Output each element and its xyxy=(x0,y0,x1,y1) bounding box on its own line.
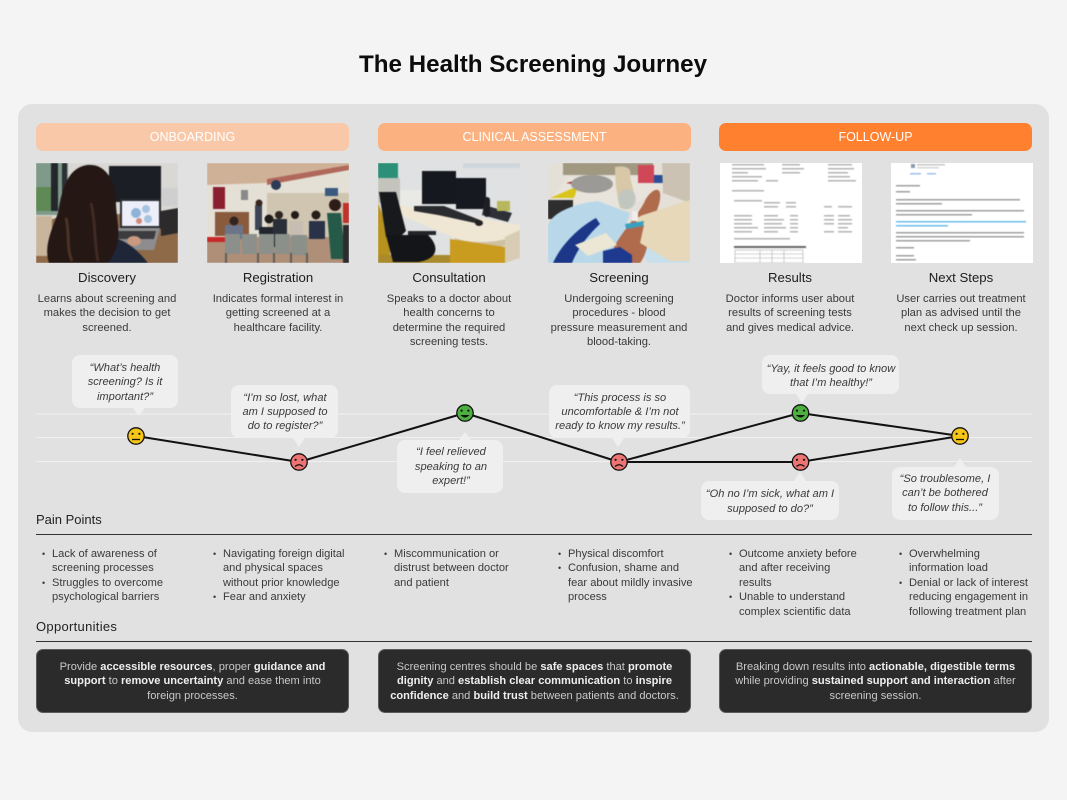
stage: screening: Screening xyxy=(589,270,649,285)
opportunity: follow-up: screening session. xyxy=(830,690,921,702)
stage: results: Results xyxy=(768,270,812,285)
stage: consultation: health concerns to xyxy=(403,307,495,319)
opportunity: clinical assessment: confidence and build trust between patients and doctors. xyxy=(390,690,679,702)
quote: next steps: to follow this...” xyxy=(908,502,983,514)
quote: discovery: screening? Is it xyxy=(88,376,163,388)
pain points: discovery: Lack of awareness of xyxy=(52,548,157,560)
stage: screening xyxy=(551,270,687,348)
pain points: discovery: Struggles to overcome xyxy=(52,577,163,589)
stage: screening: blood-taking. xyxy=(587,336,651,348)
stage: discovery: screened. xyxy=(82,322,132,334)
pain points: results: and after receiving xyxy=(739,562,830,574)
opportunity: follow-up xyxy=(719,649,1032,713)
pain points: results: Outcome anxiety before xyxy=(739,548,857,560)
stage: consultation: Consultation xyxy=(412,270,486,285)
phase header: follow-up: FOLLOW-UP xyxy=(838,130,913,144)
quote: positive result xyxy=(762,355,899,403)
heading: pain points: Pain Points xyxy=(36,512,102,527)
stage: results: results of screening tests xyxy=(728,307,852,319)
pain points: registration: Navigating foreign digital xyxy=(223,548,344,560)
pain points: consultation: distrust between doctor xyxy=(394,562,509,574)
pain points: discovery: screening processes xyxy=(52,562,154,574)
quote: negative result xyxy=(701,472,839,520)
quote: next steps xyxy=(892,458,999,520)
emoji: happy consultation xyxy=(457,405,473,421)
pain points: registration: and physical spaces xyxy=(223,562,323,574)
opportunity: onboarding xyxy=(36,649,349,713)
opportunity: onboarding: foreign processes. xyxy=(147,690,238,702)
emoji: sad screening xyxy=(611,454,627,470)
quote: negative result: “Oh no I’m sick, what am I xyxy=(706,488,834,500)
title: The Health Screening Journey xyxy=(359,51,707,78)
quote: consultation: “I feel relieved xyxy=(416,446,487,458)
quote: consultation: expert!” xyxy=(432,475,471,487)
pain points: next steps: Denial or lack of interest xyxy=(909,577,1028,589)
emoji: sad results xyxy=(792,454,809,470)
pain points: registration: without prior knowledge xyxy=(223,577,340,589)
pain points: registration xyxy=(213,548,344,603)
opportunity: clinical assessment: dignity and establish clear communication to inspire xyxy=(397,675,672,687)
quote: screening: uncomfortable & I’m not xyxy=(561,406,679,418)
pain points: results: Unable to understand xyxy=(739,591,845,603)
quote: positive result: that I’m healthy!” xyxy=(790,377,873,389)
stage: registration: Registration xyxy=(243,270,313,285)
photo: consultation xyxy=(378,163,520,263)
pain points: next steps xyxy=(899,548,1028,618)
pain points: results: complex scientific data xyxy=(739,606,851,618)
stage: screening: pressure measurement and xyxy=(551,322,687,334)
pain points: next steps: following treatment plan xyxy=(909,606,1026,618)
pain points: screening: Physical discomfort xyxy=(568,548,664,560)
pain points: next steps: reducing engagement in xyxy=(909,591,1028,603)
photo: registration xyxy=(207,163,349,263)
stage: next steps xyxy=(896,270,1026,334)
quote: registration: do to register?” xyxy=(248,420,324,432)
quote: screening xyxy=(549,385,690,447)
pain points: consultation: and patient xyxy=(394,577,449,589)
pain points: results: results xyxy=(739,577,772,589)
opportunity: clinical assessment: Screening centres should be safe spaces that promote xyxy=(397,661,672,673)
photo: screening xyxy=(548,163,690,263)
stage: next steps: plan as advised until the xyxy=(901,307,1021,319)
stage: discovery: Learns about screening and xyxy=(38,293,176,305)
quote: discovery: important?” xyxy=(97,391,154,403)
phase header: clinical assessment: CLINICAL ASSESSMENT xyxy=(462,130,607,144)
main panel xyxy=(18,104,1049,732)
stage: discovery: Discovery xyxy=(78,270,136,285)
stage: next steps: User carries out treatment xyxy=(896,293,1026,305)
phase header: onboarding: ONBOARDING xyxy=(150,130,235,144)
journey line xyxy=(136,413,960,462)
photo: discovery xyxy=(36,163,178,263)
stage: registration: getting screened at a xyxy=(226,307,330,319)
pain points: discovery: psychological barriers xyxy=(52,591,159,603)
stage: screening: Undergoing screening xyxy=(564,293,674,305)
emoji: neutral discovery xyxy=(128,428,144,444)
quote: next steps: “So troublesome, I xyxy=(900,473,990,485)
quote: discovery xyxy=(72,355,178,416)
emoji: happy results xyxy=(792,405,809,421)
pain points: consultation: Miscommunication or xyxy=(394,548,499,560)
phase header: follow-up xyxy=(719,123,1032,151)
stage: next steps: Next Steps xyxy=(929,270,993,285)
opportunity: follow-up: Breaking down results into actionable, digestible terms xyxy=(736,661,1015,673)
pain points: discovery xyxy=(42,548,163,603)
phase header: onboarding xyxy=(36,123,349,151)
quote: negative result: supposed to do?” xyxy=(727,503,814,515)
stage: registration xyxy=(213,270,343,334)
opportunity: clinical assessment xyxy=(378,649,691,713)
quote: registration: am I supposed to xyxy=(242,406,328,418)
quote: screening: ready to know my results.” xyxy=(555,420,686,432)
pain points: next steps: information load xyxy=(909,562,988,574)
pain points: screening: Confusion, shame and xyxy=(568,562,679,574)
quote: discovery: “What’s health xyxy=(90,362,160,374)
pain points: screening: fear about mildly invasive xyxy=(568,577,693,589)
quote: screening: “This process is so xyxy=(574,392,666,404)
pain points: consultation xyxy=(384,548,509,589)
stage: screening: procedures - blood xyxy=(572,307,666,319)
emoji: sad registration xyxy=(291,454,307,470)
quote: next steps: can’t be bothered xyxy=(902,487,989,499)
phase header: clinical assessment xyxy=(378,123,691,151)
pain points: screening: process xyxy=(568,591,607,603)
pain points: registration: Fear and anxiety xyxy=(223,591,306,603)
stage: consultation xyxy=(387,270,512,348)
stage: results: Doctor informs user about xyxy=(726,293,854,305)
photo: next steps email xyxy=(891,163,1033,263)
stage: discovery: makes the decision to get xyxy=(44,307,170,319)
stage: results xyxy=(726,270,854,334)
quote: positive result: “Yay, it feels good to know xyxy=(767,363,896,375)
emoji: neutral next steps xyxy=(952,428,968,444)
stage: registration: Indicates formal interest in xyxy=(213,293,343,305)
opportunity: onboarding: support to remove uncertainty and ease them into xyxy=(64,675,321,687)
quote: registration: “I’m so lost, what xyxy=(243,392,328,404)
stage: registration: healthcare facility. xyxy=(234,322,322,334)
opportunity: follow-up: while providing sustained support and interaction after xyxy=(735,675,1016,687)
stage: consultation: Speaks to a doctor about xyxy=(387,293,511,305)
opportunity: onboarding: Provide accessible resources, proper guidance and xyxy=(60,661,325,673)
stage: discovery xyxy=(38,270,176,334)
quote: consultation: speaking to an xyxy=(415,461,487,473)
pain points: screening xyxy=(558,548,693,603)
stage: next steps: next check up session. xyxy=(904,322,1018,334)
pain points: results xyxy=(729,548,857,618)
pain points: next steps: Overwhelming xyxy=(909,548,980,560)
quote: registration xyxy=(231,385,338,447)
heading: opportunities: Opportunities xyxy=(36,619,117,634)
emotion journey chart xyxy=(36,355,1032,520)
stage: results: and gives medical advice. xyxy=(726,322,854,334)
stage: consultation: screening tests. xyxy=(410,336,488,348)
photo: results document xyxy=(720,163,862,263)
quote: consultation xyxy=(397,432,503,493)
stage: consultation: determine the required xyxy=(393,322,505,334)
